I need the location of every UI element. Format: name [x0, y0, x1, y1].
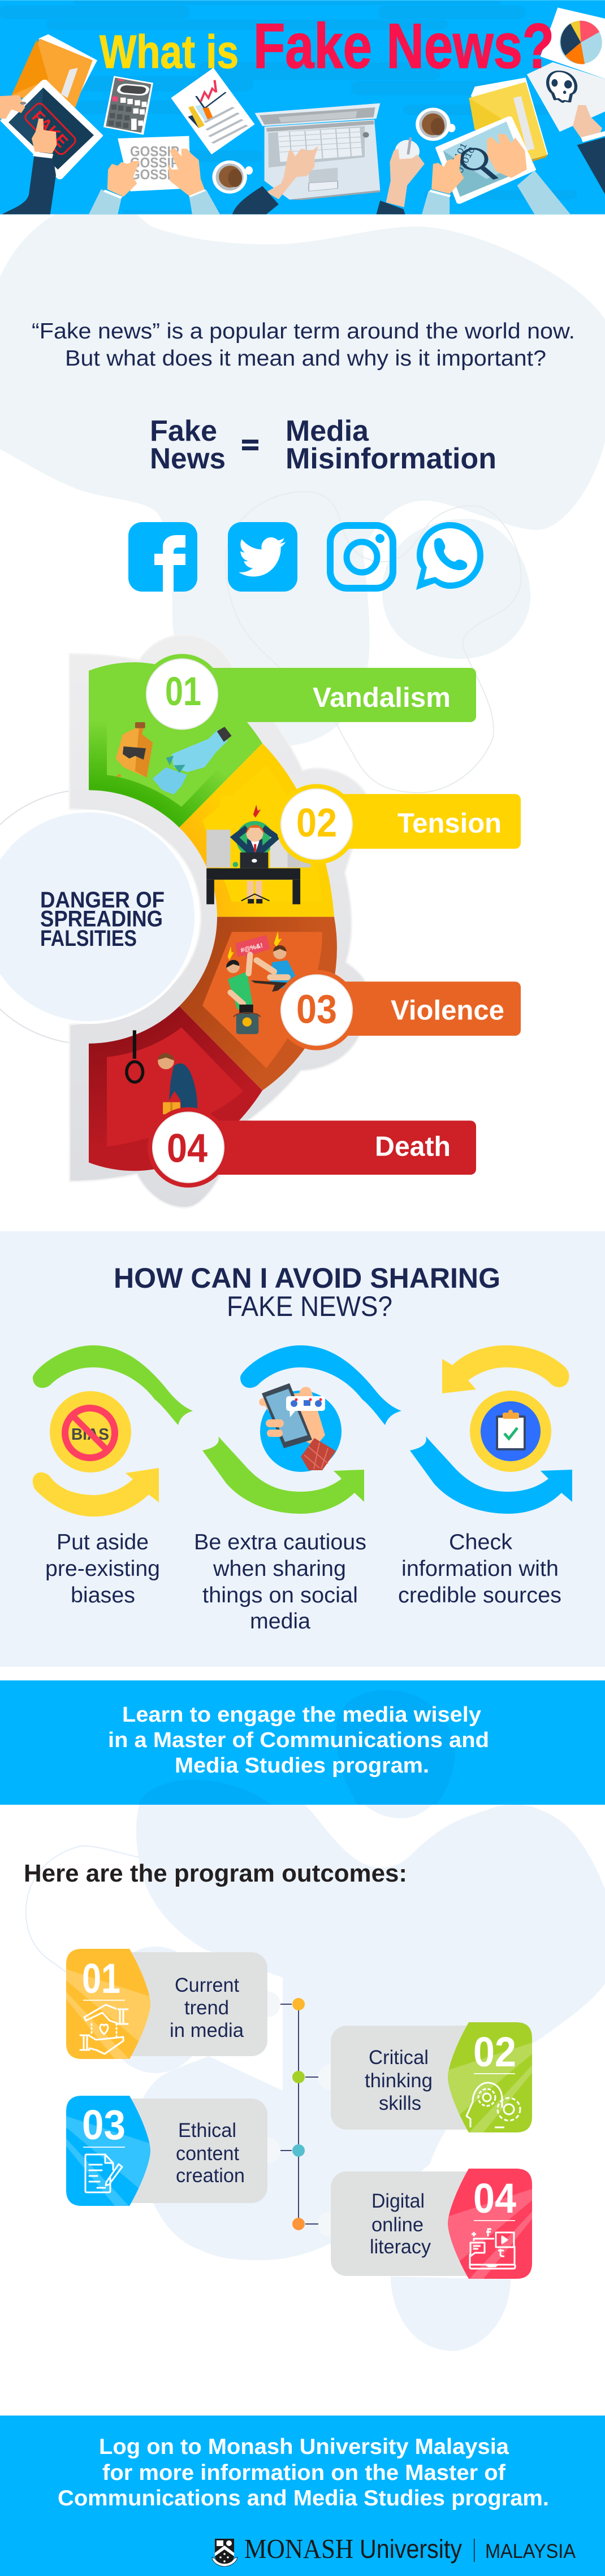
number badge 04 with bar: Death: [375, 1131, 451, 1162]
equation: fake news equals media misinformation: Media: [286, 415, 369, 448]
footer text: Log on to Monash University Malaysia: [99, 2435, 509, 2459]
arrow: blue lower arc: [410, 1436, 572, 1514]
heading: HOW CAN I AVOID SHARING: [114, 1262, 500, 1294]
icon: laptop: [255, 103, 380, 200]
icon: facebook: [128, 522, 197, 592]
card text: Digital: [371, 2190, 425, 2212]
caption: [45, 1530, 160, 1608]
equation: fake news equals media misinformation: [150, 415, 496, 475]
caption: information with: [401, 1557, 559, 1581]
icon: stressed worker at desk: [206, 805, 310, 904]
intro text: [32, 319, 575, 371]
social media icons: [128, 522, 483, 592]
icon: broken bottles: [116, 722, 232, 794]
number badge 03 with bar: [276, 970, 521, 1050]
step 3: check credible sources: [398, 1345, 572, 1608]
icon: no bias: [50, 1391, 131, 1472]
equation: fake news equals media misinformation: News: [150, 442, 226, 475]
arrow: green arc: [33, 1345, 193, 1425]
icon: orange folder: [11, 34, 97, 107]
icon: hands on gossip paper: [89, 148, 220, 214]
center circle: DANGER OF: [40, 888, 165, 913]
heading: [114, 1262, 500, 1322]
outcome card 01: [66, 1949, 267, 2059]
footer text: for more information on the Master of: [102, 2461, 506, 2485]
panel: learn to engage band: in a Master of Communications and: [108, 1728, 489, 1752]
card text: creation: [176, 2165, 245, 2187]
card text: literacy: [370, 2236, 431, 2258]
gray semicircle frame: [70, 635, 370, 1207]
icon: coffee cup right: [416, 108, 455, 141]
number badge 01 with bar: Vandalism: [313, 681, 451, 713]
panel: footer call to action: [0, 2416, 605, 2576]
card text: skills: [379, 2092, 421, 2114]
number badge 01 with bar: 01: [165, 670, 201, 714]
sector: vandalism: [89, 654, 476, 828]
logo: Monash University Malaysia: [212, 2533, 576, 2566]
panel: learn to engage band: [0, 1680, 605, 1805]
card text: Critical: [369, 2047, 429, 2069]
sector: death: [89, 1006, 476, 1188]
icon: fighting men with bomb: [226, 931, 297, 1034]
arrow: green lower arc: [202, 1436, 364, 1514]
icon: paper with pie chart: [541, 7, 605, 79]
icon: tablet with fake stamp: FAKE: [28, 107, 71, 151]
footer text: [58, 2435, 549, 2510]
step 1: put aside biases: [33, 1345, 193, 1608]
caption: things on social: [202, 1583, 358, 1608]
icon: fighting men with bomb: #@%&!: [240, 942, 263, 954]
card text: content: [176, 2143, 239, 2165]
intro text: But what does it mean and why is it important?: [65, 346, 546, 371]
outcome card 03: 03: [82, 2101, 126, 2148]
icon: tablet with magnifier: 01010: [455, 146, 477, 175]
card text: thinking: [365, 2070, 433, 2092]
outcome card 01: 01: [82, 1955, 120, 2002]
center circle: FALSITIES: [40, 926, 137, 951]
number badge 04 with bar: [148, 1107, 476, 1188]
icon: gossip paper: GOSSIP: [130, 144, 179, 160]
icon: caring hands: [80, 2005, 128, 2054]
caption: media: [250, 1609, 310, 1634]
card text: Ethical: [178, 2119, 236, 2141]
caption: Put aside: [57, 1530, 149, 1554]
card text: [370, 2190, 431, 2258]
number badge 01 with bar: [141, 654, 476, 735]
icon: gossip paper: GOSSIP: [130, 155, 179, 171]
outcome card 04: 04: [473, 2175, 516, 2222]
logo: Monash University Malaysia: University: [360, 2534, 462, 2564]
icon: hands on tablet: [422, 134, 571, 214]
outcome card 02: [331, 2022, 532, 2132]
icon: hand on laptop and sleeve: [232, 146, 318, 214]
title: [100, 11, 554, 81]
panel: danger of spreading falsities: [0, 635, 521, 1207]
icon: hand on mouse: [377, 137, 425, 214]
number badge 04 with bar: 04: [167, 1126, 208, 1171]
header banner illustration: [0, 0, 605, 214]
panel: how can I avoid sharing fake news: [0, 1231, 605, 1667]
title: What is: [100, 25, 239, 78]
number badge 03 with bar: Violence: [391, 994, 504, 1026]
caption: credible sources: [398, 1583, 561, 1608]
icon: coffee cup left: [212, 160, 253, 194]
arrow: yellow arc: [33, 1468, 159, 1517]
panel: learn to engage band: Media Studies program.: [175, 1754, 429, 1778]
icon: gossip paper: GOSSIP: [130, 167, 179, 183]
icon: noose and bowed man: [127, 1030, 198, 1115]
timeline: [254, 1991, 344, 2237]
icon: crest: [212, 2539, 237, 2566]
intro text: “Fake news” is a popular term around the world now.: [32, 319, 575, 344]
equation: fake news equals media misinformation: Fake: [150, 415, 217, 448]
caption: biases: [71, 1583, 135, 1608]
caption: Be extra cautious: [194, 1530, 366, 1554]
card text: [170, 1974, 244, 2041]
sector: tension: [179, 743, 521, 917]
icon: tablet with magnifier: 10101: [447, 141, 469, 171]
caption: when sharing: [213, 1557, 346, 1581]
outcome card 04: [331, 2169, 532, 2279]
icon: whatsapp: [416, 522, 483, 590]
card text: in media: [170, 2019, 244, 2041]
panel: learn to engage band: Learn to engage the media wisely: [122, 1703, 481, 1727]
icon: laptop with social media: [470, 2229, 515, 2269]
card text: online: [371, 2214, 424, 2236]
center circle: [0, 810, 197, 1024]
card text: Current: [175, 1974, 239, 1996]
arrow: yellow reversed arc: [442, 1345, 569, 1393]
icon: yellow folder: [469, 77, 548, 162]
logo: Monash University Malaysia: MONASH: [244, 2533, 353, 2564]
card text: [176, 2119, 245, 2187]
center circle: SPREADING: [40, 907, 163, 931]
step 2: be cautious on social media: [194, 1345, 401, 1634]
heading: program outcomes: Here are the program outcomes:: [24, 1860, 407, 1887]
sector: violence: [179, 917, 521, 1091]
icon: document and pen: [85, 2154, 122, 2192]
icon: head with gears: [466, 2083, 520, 2127]
equation: fake news equals media misinformation: Misinformation: [286, 442, 496, 475]
icon: clipboard check: [470, 1391, 551, 1472]
number badge 02 with bar: Tension: [397, 807, 502, 839]
icon: paper with skull: [527, 62, 605, 132]
caption: [194, 1530, 366, 1634]
number badge 03 with bar: 03: [296, 987, 337, 1032]
caption: [398, 1530, 561, 1608]
icon: no bias: BIAS: [71, 1426, 109, 1444]
icon: calculator: [103, 76, 153, 135]
caption: pre-existing: [45, 1557, 160, 1581]
footer text: Communications and Media Studies program.: [58, 2486, 549, 2510]
icon: tablet with magnifier: [438, 118, 533, 202]
icon: instagram: [330, 525, 393, 588]
outcome card 03: [66, 2096, 267, 2206]
card text: trend: [184, 1997, 229, 2019]
heading: FAKE NEWS?: [227, 1291, 392, 1322]
arrow: blue arc: [240, 1345, 401, 1425]
card text: [365, 2047, 433, 2114]
caption: Check: [449, 1530, 513, 1554]
icon: twitter: [228, 522, 297, 592]
number badge 02 with bar: 02: [296, 801, 337, 845]
logo: Monash University Malaysia: MALAYSIA: [485, 2540, 576, 2562]
icon: gossip paper: [118, 136, 191, 192]
number badge 02 with bar: [276, 784, 521, 865]
icon: chart paper: [171, 68, 255, 154]
icon: tablet with fake stamp: [0, 81, 100, 214]
outcome card 02: 02: [473, 2028, 516, 2075]
icon: hand holding paper and sleeve: [573, 105, 605, 196]
icon: phone in hand: [259, 1383, 342, 1472]
